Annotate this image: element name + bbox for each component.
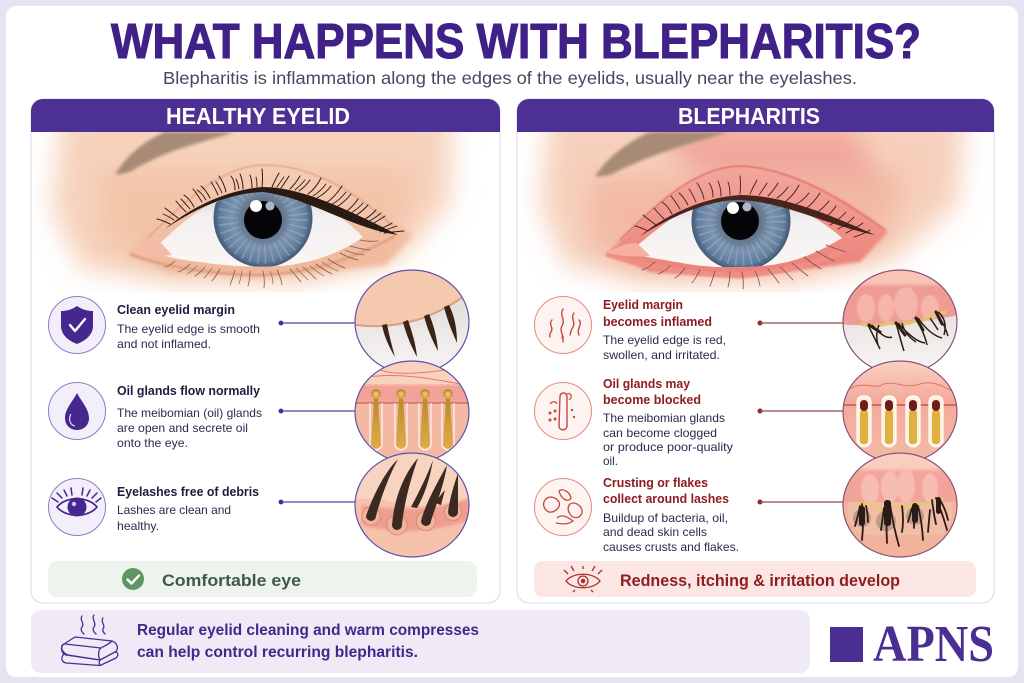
connector: lashes: [279, 500, 356, 504]
text: eyelashes free of debris: healthy.: [117, 519, 159, 533]
item: oil glands flow normally: [48, 382, 262, 450]
text: eyelid margin becomes inflamed: [603, 298, 726, 362]
text: clean eyelid margin: The eyelid edge is smooth: [117, 322, 260, 336]
text: crusting or flakes: collect around lashes: [603, 492, 729, 506]
icon: irritated eye: [564, 566, 602, 592]
item: oil glands may become blocked: [534, 377, 733, 468]
status pill: redness, itching and irritation: Redness, itching & irritation develop: [620, 572, 900, 590]
text: oil glands may become blocked: or produce poor-quality: [603, 440, 733, 454]
item: clean eyelid margin: [48, 296, 260, 354]
text: oil glands flow normally: Oil glands flow normally: [117, 384, 260, 398]
text: crusting or flakes: Buildup of bacteria, oil,: [603, 511, 728, 525]
text: eyelid margin becomes inflamed: becomes inflamed: [603, 315, 712, 329]
icon: shield with check: [48, 296, 106, 354]
text: clean eyelid margin: Clean eyelid margin: [117, 303, 235, 317]
text: oil glands may become blocked: become blocked: [603, 393, 701, 407]
text: crusting or flakes: [603, 476, 739, 554]
text: clean eyelid margin: and not inflamed.: [117, 337, 211, 351]
connector: crusted lashes: [758, 500, 844, 504]
text: oil glands may become blocked: The meibomian glands: [603, 411, 725, 425]
connector: inflamed margin: [758, 320, 844, 326]
illustration: inflamed eye: [540, 110, 965, 289]
icon: eye with lashes: [48, 478, 106, 536]
subtitle: Blepharitis is inflammation along the edges of the eyelids, usually near the eyelashes.: [163, 68, 857, 88]
tip banner: warm compress: [31, 610, 810, 673]
icon: steaming towel: [62, 615, 118, 666]
text: eyelid margin becomes inflamed: swollen, and irritated.: [603, 348, 720, 362]
panel heading: healthy eyelid: [31, 99, 500, 132]
text: crusting or flakes: and dead skin cells: [603, 525, 707, 539]
text: oil glands may become blocked: oil.: [603, 454, 618, 468]
logo: APNS: APNS: [873, 616, 994, 673]
logo: APNS: [830, 616, 994, 673]
text: clean eyelid margin: [117, 303, 260, 351]
detail circle: clean eyelid margin: [354, 269, 470, 368]
text: eyelashes free of debris: [117, 485, 259, 533]
connector: margin: [279, 321, 356, 325]
text: oil glands flow normally: are open and secrete oil: [117, 421, 248, 435]
icon: blocked gland: [534, 382, 592, 440]
icon: inflammation waves: [534, 296, 592, 354]
status pill: redness, itching and irritation: [534, 561, 976, 597]
panel heading: healthy eyelid: HEALTHY EYELID: [166, 103, 350, 129]
item: crusting or flakes: [534, 476, 739, 554]
panel: healthy eyelid: [31, 99, 500, 603]
tip text: Regular eyelid cleaning and warm compresses: [137, 622, 479, 639]
icon: flakes: [534, 478, 592, 536]
panel heading: blepharitis: BLEPHARITIS: [678, 103, 820, 129]
detail circle: clean lashes: [354, 452, 470, 558]
connector: glands: [279, 409, 356, 413]
text: crusting or flakes: Crusting or flakes: [603, 476, 708, 490]
connector: blocked glands: [758, 408, 844, 414]
text: eyelashes free of debris: Lashes are clean and: [117, 503, 231, 517]
detail circle: blocked glands: [842, 360, 958, 458]
text: eyelid margin becomes inflamed: Eyelid margin: [603, 298, 683, 312]
panel heading: blepharitis: [517, 99, 994, 132]
status pill: comfortable eye: Comfortable eye: [162, 571, 301, 590]
detail circle: crusted lashes: [842, 452, 958, 558]
icon: green check: [122, 568, 144, 590]
status pill: comfortable eye: [48, 561, 477, 597]
icon: oil drop: [48, 382, 106, 440]
detail circle: normal oil glands: [354, 360, 470, 458]
panel: blepharitis: [517, 99, 994, 603]
text: crusting or flakes: causes crusts and flakes.: [603, 540, 739, 554]
text: eyelashes free of debris: Eyelashes free of debris: [117, 485, 259, 499]
title: WHAT HAPPENS WITH BLEPHARITIS?: [111, 15, 921, 69]
text: eyelid margin becomes inflamed: The eyelid edge is red,: [603, 333, 726, 347]
text: oil glands may become blocked: Oil glands may: [603, 377, 690, 391]
item: eyelid margin becomes inflamed: [534, 296, 726, 362]
text: oil glands may become blocked: [603, 377, 733, 468]
detail circle: inflamed margin: [842, 269, 958, 368]
item: eyelashes free of debris: [48, 478, 259, 536]
illustration: healthy eye: [52, 110, 452, 288]
tip text: [137, 622, 479, 661]
text: oil glands flow normally: onto the eye.: [117, 436, 188, 450]
text: oil glands flow normally: [117, 384, 262, 450]
text: oil glands may become blocked: can become clogged: [603, 426, 717, 440]
text: oil glands flow normally: The meibomian (oil) glands: [117, 406, 262, 420]
tip text: can help control recurring blepharitis.: [137, 644, 418, 661]
